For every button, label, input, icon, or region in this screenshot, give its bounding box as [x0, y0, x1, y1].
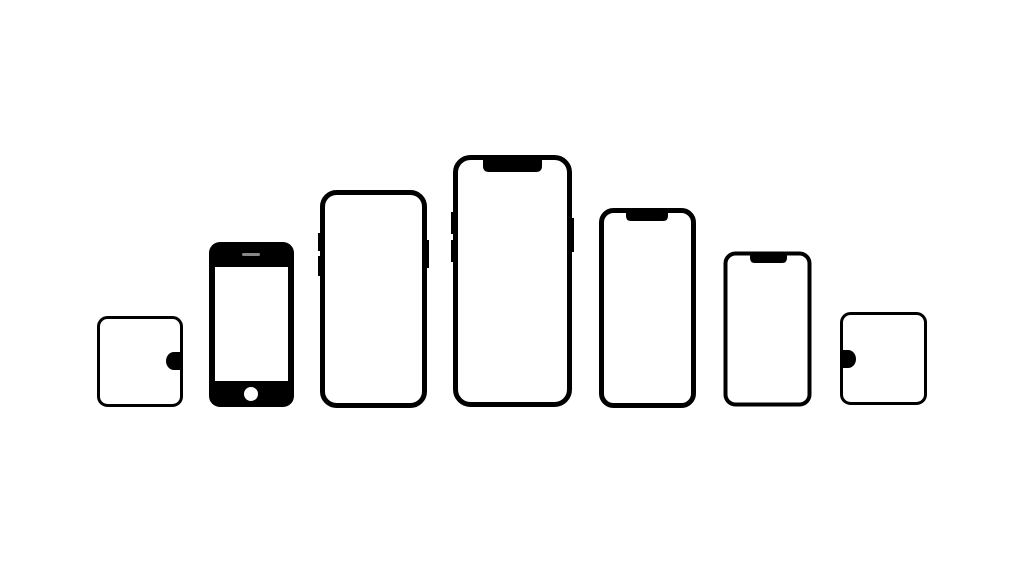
- icon: square device left: [98, 318, 182, 406]
- icon: phone with home button: [209, 242, 294, 407]
- icon: phone 5: [602, 210, 694, 406]
- icon: square device right: [841, 314, 926, 404]
- icon: phone 6: [726, 254, 810, 404]
- icon: phone 4 tall with notch: [451, 158, 574, 404]
- icon: phone 3: [318, 192, 429, 406]
